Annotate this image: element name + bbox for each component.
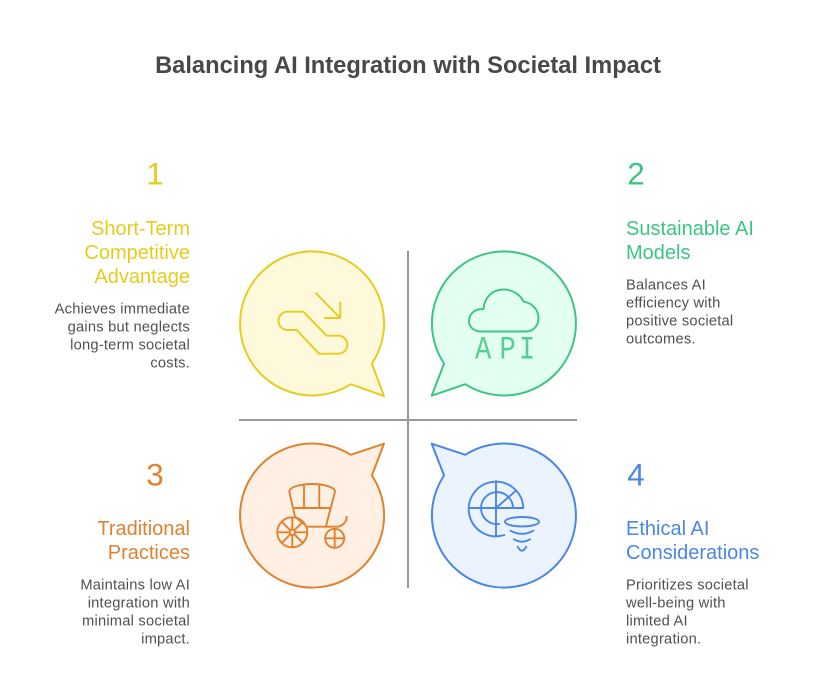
- quadrant axes: [239, 251, 577, 588]
- description 1: gains but neglects: [68, 319, 190, 335]
- description 1: costs.: [150, 355, 190, 371]
- description 3: integration with: [88, 595, 190, 611]
- API label: API: [475, 332, 535, 368]
- heading 4: Considerations: [626, 542, 759, 564]
- icon: radar and tornado: [469, 481, 539, 551]
- panel: sustainable AI models: [432, 156, 754, 396]
- number 2: 2: [627, 156, 645, 192]
- description 2: positive societal: [626, 313, 733, 329]
- number 4: 4: [627, 456, 645, 492]
- heading 3: Practices: [108, 542, 190, 564]
- description 1: Achieves immediate: [55, 301, 190, 317]
- number 3: 3: [146, 456, 164, 492]
- number 1: 1: [146, 156, 164, 192]
- description 2: outcomes.: [626, 331, 696, 347]
- description 4: Prioritizes societal: [626, 577, 749, 593]
- description 4: well-being with: [625, 595, 726, 611]
- speech bubble 2: [432, 251, 576, 396]
- heading 3: Traditional: [97, 518, 190, 540]
- description 2: efficiency with: [626, 295, 720, 311]
- icon: API cloud: [469, 290, 538, 368]
- heading 1: Advantage: [94, 266, 190, 288]
- description 4: integration.: [626, 631, 701, 647]
- heading 2: Models: [626, 242, 690, 264]
- speech bubble 3: [240, 444, 384, 588]
- description 3: impact.: [141, 631, 190, 647]
- panel: short-term competitive advantage: [55, 156, 384, 396]
- description 2: Balances AI: [626, 277, 706, 293]
- title: Balancing AI Integration with Societal Impact: [155, 53, 661, 79]
- heading 1: Short-Term: [91, 218, 190, 240]
- description 4: limited AI: [626, 613, 688, 629]
- heading 2: Sustainable AI: [626, 218, 754, 240]
- heading 1: Competitive: [84, 242, 190, 264]
- description 1: long-term societal: [70, 337, 190, 353]
- description 3: Maintains low AI: [80, 577, 190, 593]
- icon: carriage: [277, 484, 347, 548]
- heading 4: Ethical AI: [626, 518, 709, 540]
- description 3: minimal societal: [82, 613, 190, 629]
- cloud: [469, 290, 538, 332]
- speech bubble 1: [240, 251, 384, 396]
- icon: escalator: [278, 293, 347, 354]
- speech bubble 4: [432, 444, 576, 588]
- panel: ethical AI considerations: [432, 444, 759, 647]
- panel: traditional practices: [80, 444, 384, 647]
